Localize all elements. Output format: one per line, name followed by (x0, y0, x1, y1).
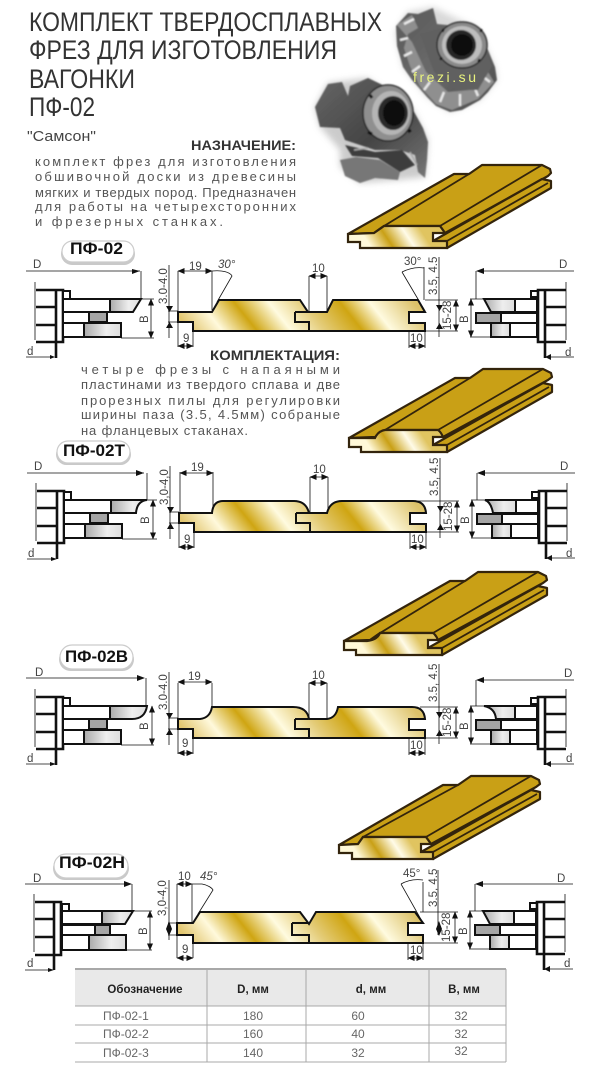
right cutter: ПФ-02В: d (566, 753, 572, 765)
heading: contents: КОМПЛЕКТАЦИЯ: (210, 348, 340, 363)
hub (35, 902, 61, 970)
isometric board: ПФ-02Н (339, 776, 540, 859)
profile: ПФ-02: 9 (183, 333, 189, 345)
profile: ПФ-02: 19 (189, 261, 202, 273)
text: purpose: обшивочной доски из древесины (35, 169, 296, 184)
profile: ПФ-02Т: 19 (191, 462, 204, 474)
table header: Обозначение (107, 984, 183, 996)
label: ПФ-02Н (53, 853, 129, 880)
isometric board: ПФ-02 (348, 165, 551, 248)
isometric board: ПФ-02Т (349, 369, 552, 452)
profile: ПФ-02В: 9 (182, 738, 188, 750)
profile: ПФ-02Н (157, 868, 458, 960)
table header: В, мм (448, 984, 480, 996)
table header: D, мм (237, 984, 269, 996)
hub (36, 290, 63, 358)
photo: cutters (315, 7, 497, 183)
table rows: 32 (454, 1027, 468, 1041)
text: purpose: для работы на четырехсторонних (35, 199, 296, 214)
title (29, 7, 382, 122)
profile: ПФ-02: 3.0-4.0 (158, 268, 170, 304)
right cutter: ПФ-02Н: B (458, 927, 470, 935)
profile: ПФ-02Т: 9 (184, 534, 190, 546)
right cutter: ПФ-02В: D (564, 668, 572, 680)
left cutter: ПФ-02Н (25, 873, 152, 972)
profile: ПФ-02: 3.5, 4.5 (428, 257, 440, 295)
profile: ПФ-02: 30° (404, 256, 421, 268)
profile: ПФ-02Н: 10 (178, 871, 191, 883)
label: ПФ-02Н: ПФ-02Н (59, 853, 125, 872)
left cutter: ПФ-02Т: D (34, 461, 42, 473)
left cutter: ПФ-02 (26, 259, 154, 359)
profile: ПФ-02: 10 (312, 263, 325, 275)
left cutter: ПФ-02: d (27, 346, 33, 358)
text: purpose (35, 154, 296, 229)
heading: purpose: НАЗНАЧЕНИЕ: (191, 138, 296, 153)
left cutter: ПФ-02Т: d (28, 548, 34, 560)
table rows (103, 1009, 468, 1060)
text: purpose: и фрезерных станках. (35, 214, 223, 229)
text: contents: четыре фрезы с напаяными (81, 362, 340, 377)
profile: ПФ-02Н: 45° (403, 868, 420, 880)
table rows: 140 (243, 1046, 263, 1060)
profile: ПФ-02 (158, 256, 458, 348)
table header: d, мм (356, 984, 386, 996)
profile: ПФ-02Т: 3,0-4,0 (159, 469, 171, 505)
right cutter: ПФ-02В: B (459, 722, 471, 730)
left cutter: ПФ-02В: B (139, 722, 151, 730)
text: purpose: комплект фрез для изготовления (35, 154, 296, 169)
right cutter: ПФ-02Н: d (564, 958, 570, 970)
title: КОМПЛЕКТ ТВЕРДОСПЛАВНЫХ (29, 7, 382, 37)
profile: ПФ-02В: 3.0-4.0 (158, 674, 170, 710)
profile: ПФ-02: 10 (410, 333, 423, 345)
table rows: 40 (351, 1027, 365, 1041)
profile: ПФ-02Н: 45° (200, 871, 218, 883)
title: ВАГОНКИ (29, 64, 135, 94)
isometric board: ПФ-02В (344, 572, 547, 655)
table rows: 180 (243, 1009, 263, 1023)
label: ПФ-02В: ПФ-02В (65, 647, 128, 666)
profile: ПФ-02Н: 10 (410, 945, 423, 957)
table rows: 32 (351, 1046, 365, 1060)
left cutter: ПФ-02В: D (35, 667, 43, 679)
photo: upper cutter (395, 7, 497, 112)
profile: ПФ-02Т (159, 458, 459, 549)
label: ПФ-02Т: ПФ-02Т (63, 441, 126, 460)
left cutter: ПФ-02: D (33, 259, 41, 271)
table rows: 160 (243, 1027, 263, 1041)
right cutter: ПФ-02 (459, 259, 574, 360)
right cutter: ПФ-02Н: D (557, 873, 565, 885)
left cutter: ПФ-02В: d (27, 753, 33, 765)
label: ПФ-02Т (56, 441, 131, 465)
text: contents (81, 362, 340, 438)
profile: ПФ-02В: 15-28 (442, 708, 454, 737)
profile: ПФ-02: 15-28 (442, 301, 454, 330)
right cutter: ПФ-02В (459, 668, 574, 767)
profile: ПФ-02Т: 10 (411, 534, 424, 546)
left cutter: ПФ-02Т (27, 461, 157, 561)
watermark: frezi.su (413, 69, 476, 85)
label: ПФ-02В (59, 645, 134, 671)
profile: ПФ-02Н: 3.5, 4.5 (428, 869, 440, 907)
profile: ПФ-02В: 10 (410, 740, 423, 752)
profile: ПФ-02В: 19 (188, 671, 201, 683)
table rows: ПФ-02-1 (103, 1009, 149, 1023)
right cutter: ПФ-02: D (559, 259, 567, 271)
left cutter: ПФ-02Т: B (140, 516, 152, 524)
left cutter: ПФ-02Н: B (138, 927, 150, 935)
right cutter: ПФ-02: d (565, 347, 571, 359)
table rows: 32 (454, 1009, 468, 1023)
label: ПФ-02: ПФ-02 (70, 239, 123, 258)
label: ПФ-02 (61, 239, 135, 265)
profile: ПФ-02Т: 15-28 (443, 502, 455, 531)
table rows: ПФ-02-2 (103, 1027, 149, 1041)
right cutter: ПФ-02Т: D (560, 461, 568, 473)
profile: ПФ-02В: 10 (312, 670, 325, 682)
profile: ПФ-02Н: 15-28 (441, 913, 453, 942)
right cutter: ПФ-02: B (459, 315, 471, 323)
right cutter: ПФ-02Т: B (460, 516, 472, 524)
right cutter: ПФ-02Т (460, 461, 575, 561)
hub (36, 697, 63, 765)
left cutter: ПФ-02Н: d (27, 958, 33, 970)
profile: ПФ-02Н: 9 (182, 944, 188, 956)
left cutter: ПФ-02В (26, 667, 154, 766)
right cutter: ПФ-02Т: d (566, 548, 572, 560)
right cutter: ПФ-02Н (458, 873, 573, 972)
text: contents: прорезных пилы для регулировки (81, 393, 340, 408)
table rows: ПФ-02-3 (103, 1046, 149, 1060)
left cutter: ПФ-02: B (139, 315, 151, 323)
text: contents: ширины паза (3.5, 4.5мм) собраные (81, 407, 340, 422)
title: ФРЕЗ ДЛЯ ИЗГОТОВЛЕНИЯ (29, 35, 337, 65)
profile: ПФ-02Т: 10 (313, 464, 326, 476)
profile: ПФ-02: 30° (218, 259, 236, 271)
photo: lower cutter (315, 78, 428, 183)
table rows: 32 (454, 1044, 468, 1058)
table header (107, 984, 480, 996)
table (75, 969, 506, 1062)
text: contents: на фланцевых стаканах. (81, 423, 248, 438)
text: contents: пластинами из твердого сплава и две (81, 377, 340, 392)
profile: ПФ-02Н: 3,0-4,0 (157, 880, 169, 916)
profile: ПФ-02В: 3.5, 4.5 (428, 664, 440, 702)
subtitle: "Самсон" (27, 128, 96, 145)
text: purpose: мягких и твердых пород. Предназначен (35, 185, 296, 200)
table rows: 60 (351, 1009, 365, 1023)
profile: ПФ-02В (158, 664, 458, 755)
title: ПФ-02 (29, 92, 95, 122)
hub (37, 491, 64, 559)
profile: ПФ-02Т: 3.5, 4.5 (429, 458, 441, 496)
left cutter: ПФ-02Н: D (33, 873, 41, 885)
